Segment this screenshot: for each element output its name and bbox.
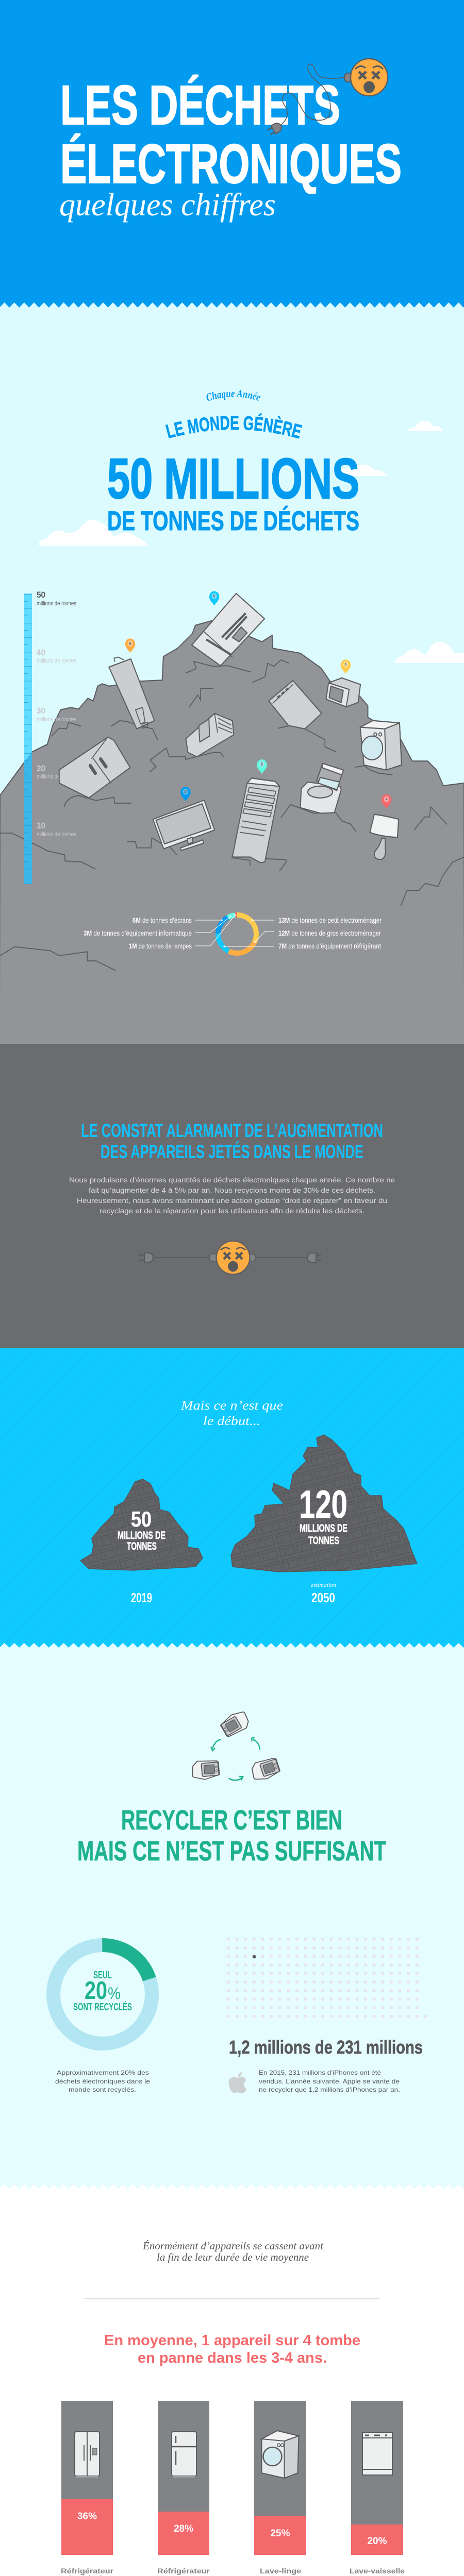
donut legend left: 1M de tonnes de lampes [129, 942, 192, 950]
icon: washer [262, 2431, 299, 2478]
panel: alarming finding [0, 1044, 464, 1348]
caption: 20%: Approximativement 20% des [57, 2069, 149, 2076]
icon: dishwasher [362, 2432, 392, 2475]
donut legend right: 7M de tonnes d’équipement réfrigérant [278, 942, 381, 950]
icon: emoji with two plugs [139, 1241, 321, 1274]
label [57, 2567, 117, 2576]
chart: mountain silhouette [0, 620, 464, 1044]
illustration: small pile 2019: 50 [131, 1507, 152, 1531]
heading: 50 millions: LE MONDE GÉNÈRE [165, 413, 302, 439]
label: Lave-linge [260, 2567, 301, 2575]
year labels [131, 1583, 336, 1605]
heading [81, 1120, 383, 1162]
chart: dot grid [224, 1935, 427, 2021]
bar: washing machine [253, 2401, 308, 2576]
heading: RECYCLER C’EST BIEN [121, 1805, 342, 1836]
icon: location pins [125, 591, 391, 809]
ruler labels: millions de tonnes [37, 716, 76, 723]
year labels: 2019 [131, 1590, 152, 1605]
panel: premature failures [0, 2189, 464, 2576]
ruler labels: millions de tonnes [37, 600, 76, 607]
caption: 20%: monde sont recyclés. [69, 2086, 136, 2093]
donut legend right [278, 916, 382, 950]
ruler labels: millions de tonnes [37, 831, 76, 838]
donut leader lines [195, 914, 274, 947]
label: Lave-vaisselle [350, 2567, 405, 2575]
ruler labels: 40 [37, 648, 45, 657]
ruler labels [37, 590, 76, 838]
chart: 20% donut: 20 [85, 1977, 107, 2005]
illustration: big pile 2050 [231, 1435, 417, 1572]
donut legend left: 3M de tonnes d’équipement informatique [84, 929, 192, 937]
ruler labels: 20 [37, 764, 45, 773]
cloud [395, 642, 464, 663]
illustration: small pile 2019 [80, 1479, 203, 1570]
body text: Heureusement, nous avons maintenant une action globale “droit de réparer” en faveur du [77, 1197, 387, 1205]
intro text: Mais ce n’est que [180, 1399, 283, 1413]
illustration: big pile 2050: TONNES [308, 1535, 339, 1547]
year labels: estimation [311, 1583, 336, 1588]
caption: iphones: ne recycler que 1,2 millions d’iPhones par an. [259, 2086, 400, 2093]
heading: 50 millions: 50 MILLIONS [107, 447, 359, 511]
icon: american fridge [75, 2432, 100, 2478]
icon: lamp [370, 815, 399, 859]
bar: american fridge [57, 2401, 117, 2576]
icon: old fridge [59, 737, 130, 798]
panel: recycling [0, 1648, 464, 2189]
body text: Nous produisons d’énormes quantités de déchets électroniques chaque année. Ce nombre ne [69, 1176, 395, 1184]
icon: location pins: B [129, 642, 131, 646]
icon: recycling cycle [191, 1709, 281, 1783]
icon: electronic unit [186, 714, 234, 757]
caption: iphones: En 2015, 231 millions d’iPhones ont été [259, 2069, 381, 2076]
icon: top-load washer [301, 764, 343, 814]
chart: donut of waste categories [218, 915, 256, 953]
intro text: la fin de leur durée de vie moyenne [157, 2251, 309, 2263]
icon: location pins: E [261, 762, 263, 767]
icon: dishwasher [269, 681, 322, 729]
intro text: le début... [203, 1414, 260, 1428]
title: LES DÉCHETS [60, 74, 340, 136]
icon: apple logo [229, 2072, 246, 2093]
icon: american fridge [192, 594, 264, 666]
icon: fridge [172, 2432, 196, 2478]
chart: 20% donut: % [108, 1984, 121, 2003]
illustration: big pile 2050: 120 [299, 1483, 347, 1527]
heading: 50 millions: Chaque Année [206, 390, 261, 401]
heading [104, 2332, 360, 2366]
caption: iphones: vendus. L’année suivante, Apple se vante de [259, 2078, 400, 2085]
body text: recyclage et de la réparation pour les utilisateurs afin de réduire les déchets. [100, 1207, 364, 1215]
intro text: Énormément d’appareils se cassent avant [142, 2240, 324, 2252]
appliances in the pile [59, 591, 402, 862]
heading: en panne dans les 3-4 ans. [138, 2350, 327, 2366]
illustration: small pile 2019: TONNES [127, 1540, 157, 1552]
caption: 20%: déchets électroniques dans le [55, 2078, 150, 2085]
intro text [180, 1399, 283, 1428]
icon: location pins: F [386, 798, 388, 802]
icon: location pins: D [185, 790, 187, 794]
donut legend left: 6M de tonnes d’écrans [132, 916, 192, 924]
bar: dishwasher: 20% [367, 2536, 387, 2547]
bar: fridge with freezer: 28% [174, 2523, 193, 2534]
icon: front-load washer [360, 721, 402, 770]
bar: washing machine: 25% [270, 2528, 290, 2539]
heading: En moyenne, 1 appareil sur 4 tombe [104, 2332, 360, 2349]
heading: 50 millions: DE TONNES DE DÉCHETS [107, 505, 359, 536]
ruler labels: 50 [37, 590, 45, 600]
icon: monitor [153, 800, 214, 851]
heading: 50 millions [107, 390, 359, 536]
stat: iphones: 1,2 millions de 231 millions [229, 2037, 423, 2058]
cloud [335, 465, 387, 476]
ruler labels: 30 [37, 706, 45, 716]
caption: iphones [259, 2069, 400, 2093]
panel: header [0, 0, 464, 308]
panel: growth projection [0, 1348, 464, 1648]
subtitle: quelques chiffres [59, 188, 276, 223]
chart: 20% donut [54, 1945, 152, 2043]
icon: location pins: A [344, 663, 347, 667]
cloud [408, 421, 442, 431]
caption: 20% [55, 2069, 150, 2093]
body text [69, 1176, 395, 1215]
bar: fridge with freezer [150, 2401, 218, 2576]
label: Réfrigérateur [61, 2567, 114, 2575]
icon: server tower [233, 778, 279, 862]
chart: 20% donut: SEUL [93, 1970, 112, 1981]
bar: dishwasher [350, 2401, 405, 2575]
body text: fait qu’augmenter de 4 à 5% par an. Nous recyclons moins de 30% de ces déchets. [89, 1187, 375, 1194]
heading [77, 1805, 386, 1867]
title [60, 74, 402, 195]
intro text [142, 2240, 324, 2263]
illustration: small pile 2019: MILLIONS DE [118, 1530, 165, 1541]
label: Réfrigérateur [157, 2567, 210, 2575]
donut legend right: 13M de tonnes de petit électroménager [278, 916, 382, 924]
chart: height ruler [24, 594, 32, 884]
cloud [39, 520, 148, 546]
panel: mountain of waste [0, 308, 464, 1045]
illustration: big pile 2050: MILLIONS DE [300, 1522, 347, 1534]
bar: american fridge: 36% [77, 2511, 97, 2522]
icon: unplugged emoji with cord [267, 59, 388, 137]
icon: location pins: C [213, 595, 216, 599]
ruler labels: millions de tonnes [37, 657, 76, 664]
chart: 20% donut: SONT RECYCLÉS [73, 2001, 132, 2013]
donut legend left [84, 916, 192, 950]
ruler labels: millions de tonnes [37, 773, 76, 780]
donut legend right: 12M de tonnes de gros électroménager [278, 929, 381, 937]
icon: microwave [326, 678, 360, 707]
year labels: 2050 [311, 1590, 335, 1605]
ruler labels: 10 [37, 821, 45, 831]
icon: water heater [109, 657, 155, 729]
